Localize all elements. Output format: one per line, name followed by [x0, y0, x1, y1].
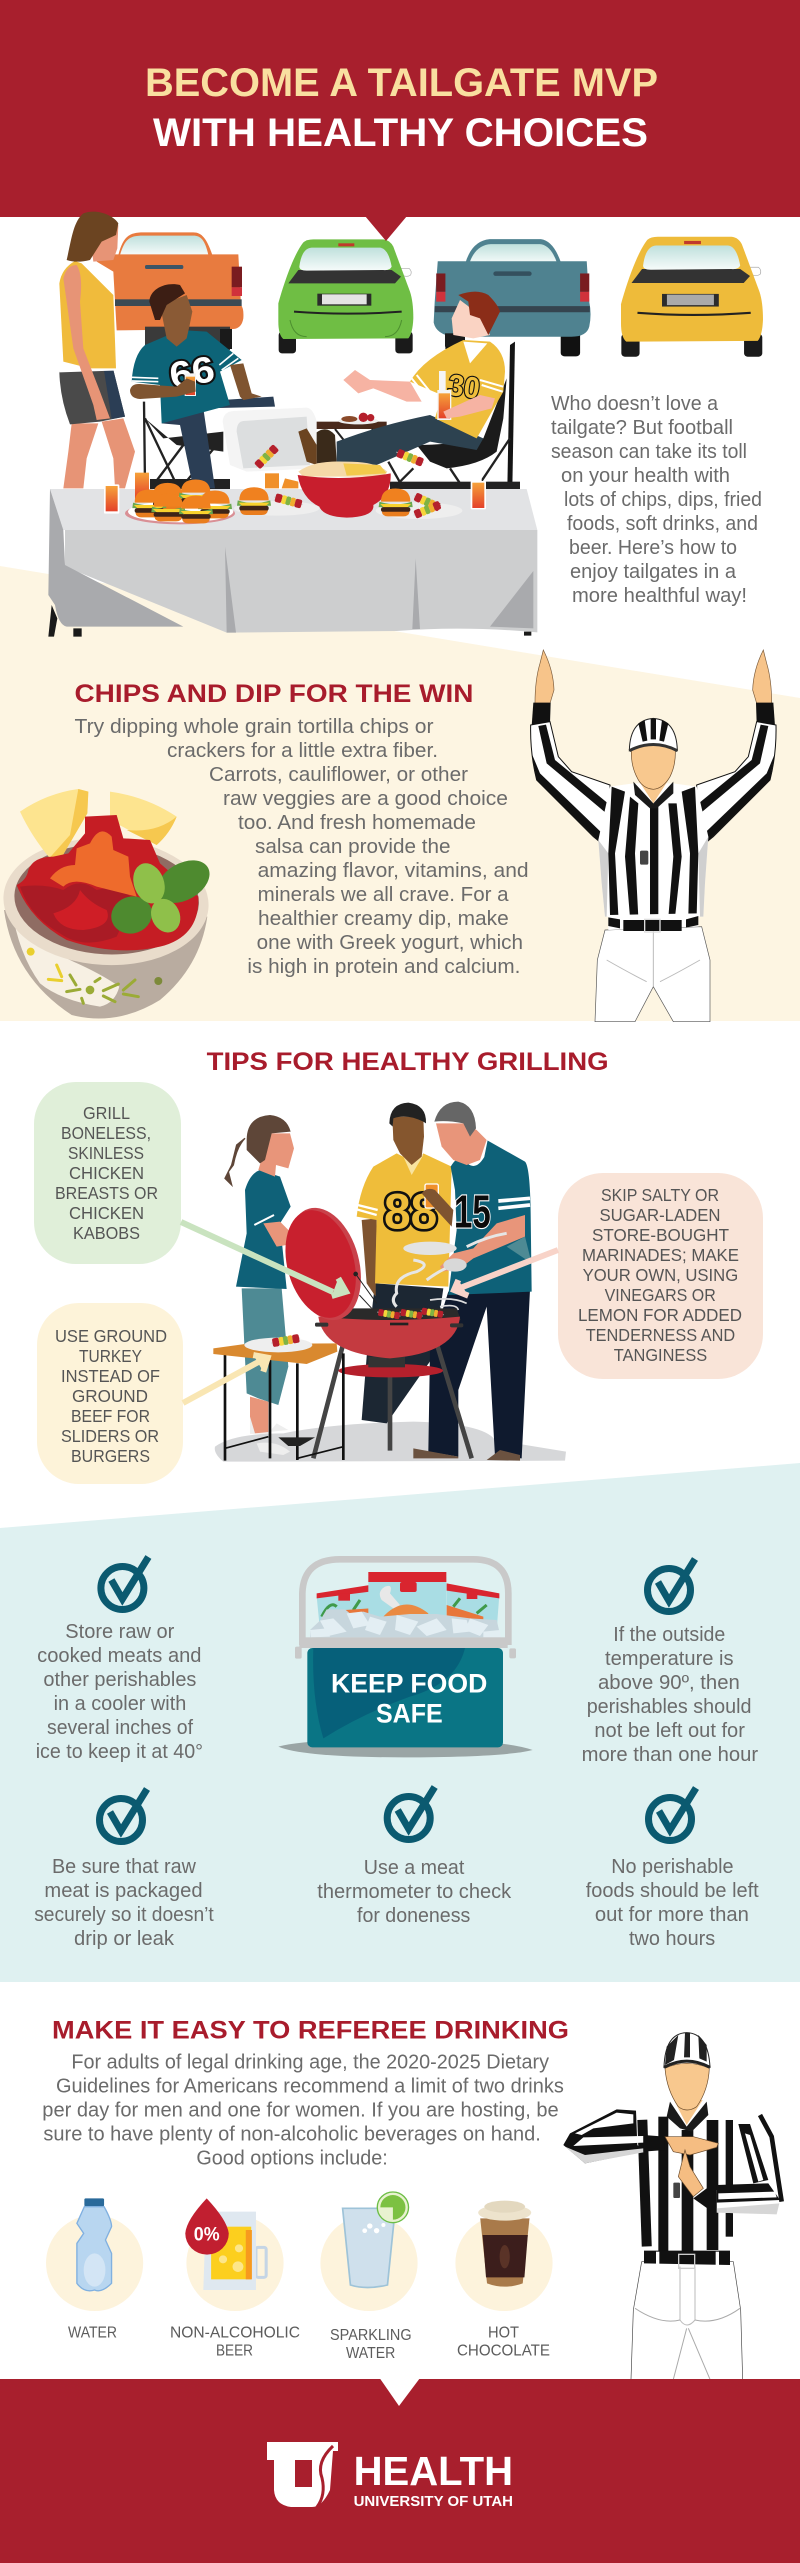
ice [310, 1609, 501, 1637]
intro text: tailgate? But football [551, 417, 733, 439]
food safety tip: thermometer: for doneness [357, 1905, 470, 1927]
man in yellow jersey: 88 [384, 1183, 437, 1239]
intro text: lots of chips, dips, fried [564, 489, 762, 511]
belt [608, 913, 698, 932]
chips and dip text: crackers for a little extra fiber. [167, 740, 438, 762]
callout: marinades: TANGINESS [614, 1345, 707, 1365]
callout: marinades: YOUR OWN, USING [583, 1265, 738, 1285]
plate with burger and kabobs right [376, 489, 462, 519]
intro text: beer. Here’s how to [569, 537, 737, 559]
callout: ground turkey [37, 1303, 183, 1484]
logo [267, 2442, 513, 2510]
car: orange pickup [97, 232, 243, 349]
man in teal jersey [130, 284, 275, 488]
arm left [563, 2109, 643, 2163]
cooler body [307, 1648, 503, 1747]
callout: ground turkey: INSTEAD OF [61, 1366, 160, 1386]
callout: grill chicken: KABOBS [73, 1223, 140, 1243]
food safety tip: outside temperature: If the outside [613, 1624, 725, 1646]
food safety tip: packaged securely: drip or leak [74, 1928, 175, 1950]
illustration: tailgate party scene [48, 212, 537, 637]
car: yellow hatchback [621, 237, 763, 357]
heading: chips and dip: CHIPS AND DIP FOR THE WIN [74, 680, 474, 708]
plate with burger and kabob [234, 487, 319, 516]
food safety tip: thermometer: Use a meat [364, 1857, 465, 1879]
man in teal jersey [413, 1102, 532, 1461]
food safety tip: two hours: two hours [629, 1928, 715, 1950]
man in yellow jersey [298, 292, 505, 465]
arrow: cream to table [183, 1355, 268, 1403]
logo mark: U with DNA strand [267, 2442, 338, 2507]
arrow: peach to grill [454, 1250, 558, 1296]
intro text: more healthful way! [572, 585, 747, 607]
icon: non-alcoholic beer: 0% [194, 2224, 220, 2246]
food safety tip: outside temperature: not be left out for [594, 1720, 745, 1742]
callout: grill chicken: BONELESS, [61, 1123, 151, 1143]
logo: HEALTH [354, 2448, 513, 2494]
hands [643, 2135, 718, 2215]
referee: touchdown signal [531, 650, 776, 1022]
striped shirt [598, 780, 708, 918]
callout: marinades [558, 1173, 763, 1379]
table [48, 489, 537, 637]
drinking text: Guidelines for Americans recommend a limit of two drinks [56, 2076, 564, 2098]
drink labels: NON-ALCOHOLIC [170, 2325, 300, 2342]
ice cubes [310, 1612, 501, 1637]
drink labels: HOT [488, 2325, 520, 2342]
drink labels: WATER [68, 2325, 117, 2342]
chips and dip text: is high in protein and calcium. [247, 956, 520, 978]
food safety tip: packaged securely: Be sure that raw [52, 1856, 196, 1878]
food safety tip: store in cooler: cooked meats and [37, 1645, 202, 1667]
callout: marinades: MARINADES; MAKE [582, 1245, 739, 1265]
food safety tip: store in cooler: Store raw or [65, 1621, 175, 1643]
callout: grill chicken: CHICKEN [69, 1163, 144, 1183]
food safety tip: store in cooler: several inches of [47, 1717, 193, 1739]
chips and dip text: one with Greek yogurt, which [257, 932, 523, 954]
car: green hatchback [278, 239, 413, 353]
callout: grill chicken: SKINLESS [68, 1143, 144, 1163]
woman in teal [225, 1115, 294, 1455]
icon: salsa bowl with chips [0, 789, 217, 1019]
check icons [100, 1557, 696, 1842]
callout: grill chicken: GRILL [83, 1103, 130, 1123]
food safety tip: two hours: No perishable [611, 1856, 734, 1878]
drinking text: per day for men and one for women. If you are hosting, be [42, 2100, 559, 2122]
referee: time-out signal [563, 2033, 782, 2379]
chips and dip text: amazing flavor, vitamins, and [258, 860, 529, 882]
food safety tip: outside temperature: more than one hour [582, 1744, 758, 1766]
icon: hot chocolate [455, 2201, 553, 2311]
car: blue pickup [434, 239, 591, 356]
side table with snack plate [317, 413, 387, 442]
cooler label: SAFE [376, 1699, 443, 1729]
intro text: Who doesn’t love a [551, 393, 719, 415]
arrow: green to grill [181, 1222, 346, 1296]
callout: marinades: SUGAR-LADEN [600, 1205, 720, 1225]
heading: referee drinking: MAKE IT EASY TO REFEREE DRINKING [52, 2016, 569, 2044]
food safety tip: store in cooler: other perishables [43, 1669, 196, 1691]
icon: water bottle [46, 2198, 143, 2311]
icon: non-alcoholic beer [185, 2198, 284, 2311]
intro text [551, 393, 762, 607]
cooler rim [295, 1637, 516, 1659]
drinking text: sure to have plenty of non-alcoholic beverages on hand. [43, 2124, 541, 2146]
man in teal jersey: 15 [454, 1185, 491, 1237]
food safety tip: packaged securely [34, 1856, 214, 1950]
callout: ground turkey: BEEF FOR [71, 1406, 150, 1426]
drink labels: CHOCOLATE [457, 2343, 550, 2360]
side table with plate [213, 1334, 343, 1461]
arm right [717, 2112, 782, 2214]
cooler illustration [278, 1559, 533, 1757]
callout: ground turkey: USE GROUND [55, 1326, 167, 1346]
food safety tip: outside temperature: above 90º, then [598, 1672, 740, 1694]
face and cap [664, 2033, 710, 2110]
folding chair left [144, 327, 232, 489]
drink labels: SPARKLING [330, 2327, 412, 2344]
white cooler lid [223, 408, 317, 472]
food safety tip: two hours [586, 1856, 759, 1950]
chips and dip text: too. And fresh homemade [238, 812, 476, 834]
drink labels: BEER [216, 2343, 253, 2360]
food safety tip: thermometer: thermometer to check [317, 1881, 512, 1903]
teal section background [0, 1463, 800, 1982]
woman standing [59, 212, 135, 488]
title: WITH HEALTHY CHOICES [153, 111, 648, 155]
arm left [531, 650, 610, 843]
chips and dip text: salsa can provide the [255, 836, 450, 858]
callout: grill chicken [34, 1082, 181, 1264]
drinking text: For adults of legal drinking age, the 2020-2025 Dietary [71, 2052, 549, 2074]
food safety tip: two hours: out for more than [595, 1904, 749, 1926]
icon: sparkling water [320, 2192, 418, 2311]
intro text: enjoy tailgates in a [570, 561, 737, 583]
callout: ground turkey: GROUND [72, 1386, 148, 1406]
man in yellow jersey [357, 1103, 453, 1423]
title [145, 61, 658, 155]
heading: grilling: TIPS FOR HEALTHY GRILLING [207, 1048, 609, 1076]
callout: ground turkey: BURGERS [71, 1446, 150, 1466]
food containers [317, 1572, 499, 1633]
folding chair right [388, 333, 520, 489]
striped shirt [637, 2100, 740, 2253]
title: BECOME A TAILGATE MVP [145, 61, 658, 105]
chips and dip text: minerals we all crave. For a [258, 884, 509, 906]
face and cap [629, 718, 677, 789]
callout: marinades: STORE-BOUGHT [592, 1225, 729, 1245]
food safety tip: outside temperature: temperature is [605, 1648, 734, 1670]
skewer on cooler [253, 443, 280, 470]
food safety tip: packaged securely: meat is packaged [44, 1880, 203, 1902]
skewer by chair [395, 448, 425, 467]
intro text: season can take its toll [551, 441, 747, 463]
food safety tip: outside temperature: perishables should [587, 1696, 752, 1718]
logo: UNIVERSITY OF UTAH [354, 2494, 513, 2510]
pants [631, 2262, 743, 2379]
cream section background [0, 566, 800, 1021]
pants [595, 927, 710, 1022]
belt [644, 2251, 730, 2268]
callout: ground turkey: SLIDERS OR [61, 1426, 159, 1446]
arm right [697, 650, 776, 843]
drinking text: Good options include: [196, 2148, 388, 2170]
ground shadow [215, 1422, 566, 1462]
man in teal jersey: 66 [166, 348, 218, 396]
drink labels: WATER [346, 2345, 395, 2362]
intro text: on your health with [561, 465, 730, 487]
popcorn bowl [298, 461, 391, 518]
callout: marinades: LEMON FOR ADDED [578, 1305, 742, 1325]
drinks on table [104, 468, 486, 514]
intro text: foods, soft drinks, and [567, 513, 758, 535]
cooler shadow [278, 1739, 533, 1757]
callout: marinades: VINEGARS OR [605, 1285, 716, 1305]
drinking text [42, 2052, 564, 2170]
illustration: parked cars [97, 232, 763, 357]
chips and dip text: Try dipping whole grain tortilla chips or [74, 716, 434, 738]
food safety tip: two hours: foods should be left [586, 1880, 759, 1902]
callout: grill chicken: CHICKEN [69, 1203, 144, 1223]
man in yellow jersey: 30 [446, 369, 482, 406]
food safety tip: store in cooler: ice to keep it at 40° [36, 1741, 203, 1763]
chips and dip text [74, 716, 529, 978]
food safety tip: store in cooler: in a cooler with [54, 1693, 186, 1715]
food safety tip: outside temperature [582, 1624, 758, 1766]
food safety tip: thermometer [317, 1857, 512, 1927]
chips and dip text: Carrots, cauliflower, or other [209, 764, 468, 786]
chips and dip text: raw veggies are a good choice [223, 788, 508, 810]
footer banner [0, 2378, 800, 2563]
callout: marinades: TENDERNESS AND [586, 1325, 735, 1345]
header banner [0, 0, 800, 241]
drink labels [68, 2325, 550, 2362]
smoke and plate [393, 1233, 507, 1310]
illustration: people grilling [213, 1102, 566, 1462]
grill [274, 1200, 472, 1458]
food safety tip: packaged securely: securely so it doesn’t [34, 1904, 214, 1926]
cooler label [331, 1668, 487, 1729]
food safety tip: store in cooler [36, 1621, 203, 1763]
cooler handle [302, 1559, 508, 1645]
plate of burgers [125, 480, 235, 524]
callout: ground turkey: TURKEY [79, 1346, 142, 1366]
callout: grill chicken: BREASTS OR [55, 1183, 158, 1203]
cooler label: KEEP FOOD [331, 1668, 487, 1698]
chips and dip text: healthier creamy dip, make [258, 908, 509, 930]
callout: marinades: SKIP SALTY OR [601, 1185, 719, 1205]
